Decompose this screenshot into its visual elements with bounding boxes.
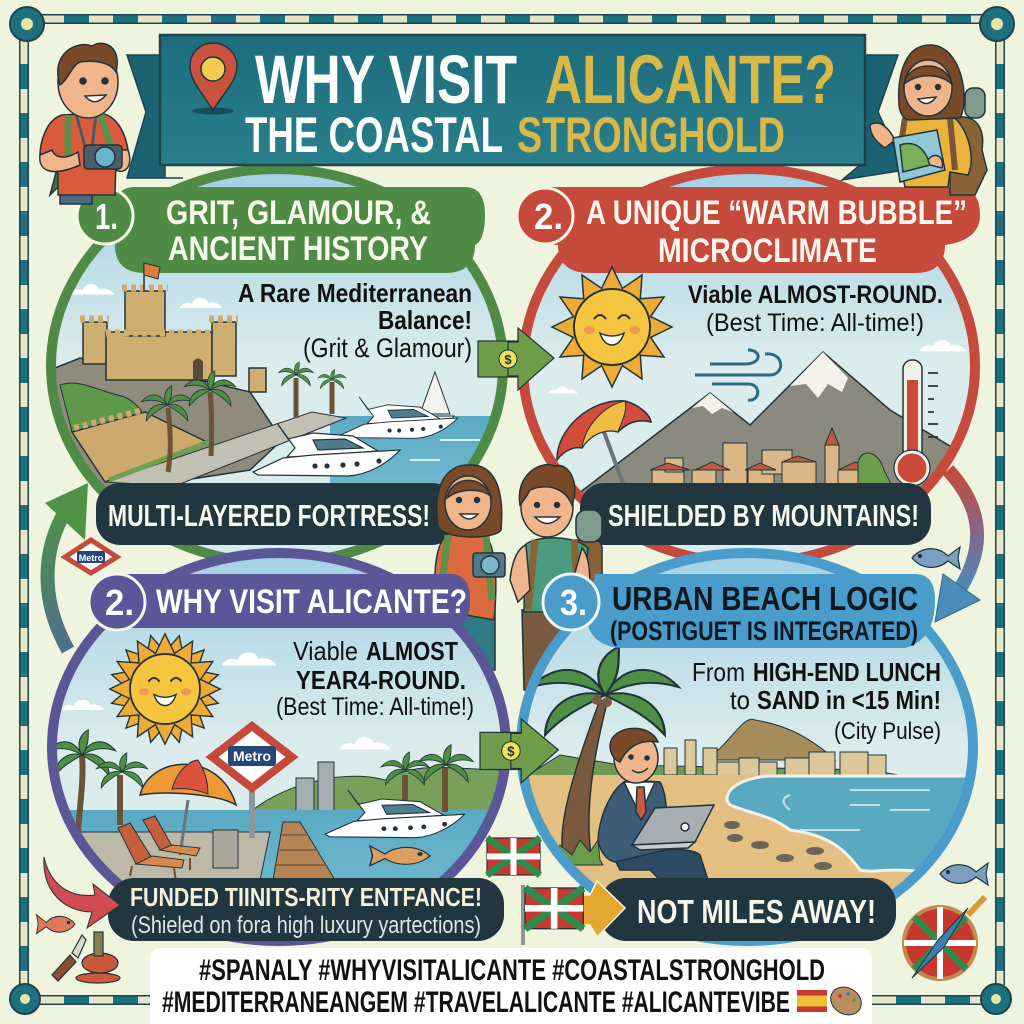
heading pill: (POSTIGUET IS INTEGRATED)	[610, 616, 918, 646]
description: YEAR4-ROUND.	[296, 665, 466, 695]
description: ALMOST	[366, 636, 458, 666]
caption bar: NOT MILES AWAY!	[637, 893, 876, 930]
panel: grit, glamour and history	[40, 160, 520, 570]
heading pill	[587, 574, 935, 648]
description	[276, 636, 474, 721]
icon: palette	[826, 982, 866, 1020]
description	[688, 281, 943, 337]
small metro icon	[65, 540, 117, 573]
traveller: woman with map	[870, 45, 987, 195]
ribbon tails	[127, 55, 905, 180]
caption bar: (Shieled on fora high luxury yartections)	[131, 912, 481, 939]
description: (Grit & Glamour)	[303, 333, 472, 363]
traveller: man with camera	[40, 43, 130, 204]
panel: urban beach logic	[515, 545, 990, 950]
badge 3	[543, 574, 599, 630]
caption bar: SHIELDED BY MOUNTAINS!	[608, 498, 919, 533]
description: Balance!	[378, 305, 472, 335]
scene: beach, metro, pier	[57, 558, 500, 881]
scene: wind, mountains, town	[528, 174, 970, 553]
title banner: WHY VISIT	[255, 41, 517, 118]
panel: warm bubble microclimate	[515, 160, 990, 570]
small metro icon: Metro	[79, 553, 104, 563]
badge 2: 2.	[534, 196, 563, 237]
heading pill: WHY VISIT ALICANTE?	[156, 583, 467, 621]
arrow: red curve to caption	[44, 857, 120, 928]
hashtag footer	[150, 948, 872, 1024]
icon: fish right top	[912, 547, 960, 569]
heading pill	[113, 187, 485, 273]
description: (Best Time: All-time!)	[276, 693, 474, 721]
title banner: STRONGHOLD	[517, 107, 785, 163]
description: Viable	[293, 636, 358, 666]
caption bar	[580, 483, 931, 545]
panel: why visit alicante	[45, 545, 515, 950]
badge 2: 2.	[105, 582, 134, 623]
caption bar: MULTI-LAYERED FORTRESS!	[108, 498, 430, 533]
heading pill	[535, 187, 980, 273]
description: to	[730, 685, 750, 715]
center couple of travellers	[435, 465, 602, 690]
heading pill: MICROCLIMATE	[658, 232, 877, 270]
metro sign	[212, 726, 292, 788]
title banner	[127, 35, 905, 180]
icon: smiling sun	[552, 267, 672, 387]
caption bar: FUNDED TIINITS-RITY ENTFANCE!	[130, 882, 482, 912]
arrow: red to blue loop down to panel 4	[935, 470, 980, 622]
castle flag	[144, 263, 160, 292]
panel ring	[521, 553, 973, 941]
scene: castle and marina	[56, 174, 498, 553]
panel ring	[52, 553, 506, 941]
flag: basque on pole	[523, 885, 583, 945]
description: HIGH-END LUNCH	[753, 657, 941, 687]
icon: map pin	[190, 43, 237, 114]
caption bar	[600, 878, 896, 941]
icon: tools and pot	[52, 932, 120, 983]
scene: beach with laptop man	[528, 558, 968, 890]
badge 2	[89, 574, 145, 630]
description: Viable ALMOST-ROUND.	[688, 281, 943, 309]
icon: fish left	[37, 915, 75, 934]
laptop man	[598, 728, 714, 880]
description	[692, 657, 941, 745]
arrow: money link bottom	[480, 719, 558, 783]
description: A Rare Mediterranean	[238, 278, 472, 308]
thermometer	[894, 360, 938, 486]
badge 1	[77, 188, 133, 244]
description: From	[692, 657, 745, 687]
icon: spanish flag	[797, 990, 827, 1012]
panel ring	[523, 169, 975, 563]
description: (City Pulse)	[834, 718, 941, 745]
woman with camera	[435, 465, 505, 670]
badge 3: 3.	[560, 582, 587, 623]
man with backpack	[510, 465, 602, 690]
panel ring	[51, 169, 503, 563]
heading pill	[120, 574, 470, 628]
arrow: green loop up to panel 1	[45, 483, 88, 650]
metro sign: Metro	[233, 748, 271, 764]
heading pill: URBAN BEACH LOGIC	[612, 580, 918, 617]
arrow: money link top	[478, 328, 554, 390]
heading pill: ANCIENT HISTORY	[168, 230, 428, 268]
description: SAND in <15 Min!	[757, 685, 941, 715]
arrow: gold to caption	[560, 881, 625, 937]
caption bar	[96, 483, 456, 545]
icon: compass	[904, 897, 985, 979]
badge 1: 1.	[95, 196, 118, 237]
description: (Best Time: All-time!)	[706, 309, 924, 337]
icon: fish right bottom	[940, 863, 988, 885]
badge 2	[517, 188, 573, 244]
flag: basque small	[487, 838, 540, 875]
description	[238, 278, 472, 363]
title banner: THE COASTAL	[245, 107, 503, 163]
caption bar	[108, 878, 504, 941]
heading pill: GRIT, GLAMOUR, &	[166, 194, 431, 232]
title banner: ALICANTE?	[545, 41, 836, 118]
